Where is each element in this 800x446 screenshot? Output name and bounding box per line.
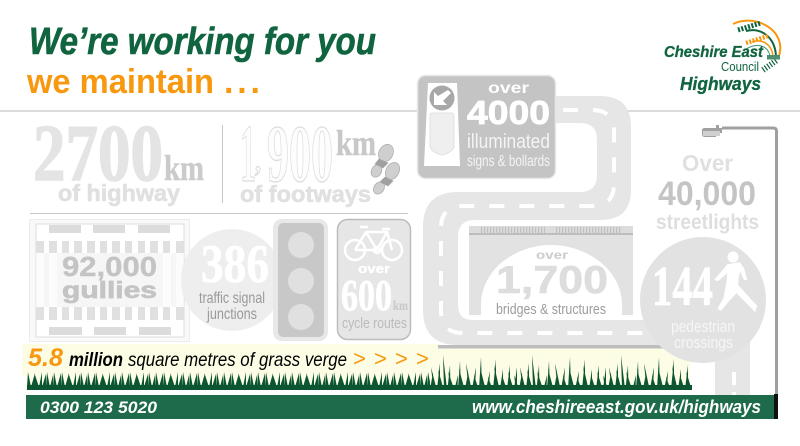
panel: bridges and structures <box>469 226 633 318</box>
panel: pedestrian crossings: pedestrian <box>671 317 735 336</box>
stat: 1,900km of footways <box>240 108 376 207</box>
panel: bridges and structures: over <box>536 248 568 262</box>
title: We’re working for you <box>29 21 376 63</box>
panel: illuminated signs and bollards: 4000 <box>467 94 550 131</box>
stat: 1,900km of footways: 1 <box>240 108 256 199</box>
header rule <box>0 110 800 112</box>
panel: traffic signal junctions: junctions <box>206 306 257 323</box>
logo wheat emblem <box>733 21 780 70</box>
road <box>423 96 750 395</box>
icon: traffic light <box>273 219 328 341</box>
stat: 2700km of highway: 2700 <box>33 110 163 198</box>
panel: pedestrian crossings: 144 <box>652 256 713 318</box>
icon: bicycle <box>345 227 402 260</box>
icon: pedestrian <box>714 252 757 312</box>
stat: 40,000 streetlights <box>656 150 759 234</box>
logo council: Council <box>721 59 759 74</box>
panel: cycle routes: cycle routes <box>342 315 407 332</box>
bridge parapet <box>469 226 633 235</box>
divider <box>222 125 223 203</box>
icon: keep left arrow <box>430 86 454 110</box>
panel: cycle routes: over <box>358 261 390 276</box>
logo: Cheshire East Council Highways <box>664 21 780 94</box>
panel: illuminated signs and bollards: illuminated <box>467 131 550 153</box>
stat: 2700km of highway: km <box>164 148 204 188</box>
stat: 2700km of highway: of highway <box>58 180 180 206</box>
panel: illuminated signs and bollards: signs & bollards <box>467 153 550 170</box>
subtitle: . . . <box>224 63 260 101</box>
panel: cycle routes <box>338 220 410 340</box>
panel: traffic signal junctions <box>181 229 283 331</box>
panel: traffic signal junctions: 386 <box>201 234 269 294</box>
panel: traffic signal junctions: traffic signal <box>199 290 265 307</box>
gully grate <box>36 224 184 337</box>
panel: bridges and structures: bridges & structures <box>496 301 606 318</box>
stat: 1,900km of footways: of footways <box>240 181 371 207</box>
panel: cycle routes: km <box>393 299 408 314</box>
contact bar <box>26 394 778 419</box>
icon: street lamp <box>702 125 776 396</box>
logo wordmark: Cheshire East <box>664 44 764 61</box>
panel: pedestrian crossings: crossings <box>674 333 733 352</box>
grass verge text: 5.8 <box>28 344 63 372</box>
logo highways: Highways <box>680 74 761 94</box>
bollard <box>430 113 454 155</box>
stat: 40,000 streetlights: streetlights <box>656 211 759 234</box>
bridge arch <box>481 245 622 315</box>
sign plate <box>424 83 460 166</box>
panel: gullies: gullies <box>62 277 157 303</box>
stat: 1,900km of footways: km <box>336 123 376 163</box>
grass verge text: >>>> <box>353 346 429 371</box>
icon: footprints <box>369 142 402 196</box>
stat: 40,000 streetlights: 40,000 <box>658 175 756 213</box>
grass verge text: million <box>69 350 123 371</box>
stat: 1,900km of footways: 900 <box>267 108 333 199</box>
panel: illuminated signs and bollards: over <box>488 80 529 97</box>
panel: gullies: 92,000 <box>62 251 157 282</box>
panel: bridges and structures: 1,700 <box>496 259 608 302</box>
website: www.cheshireeast.gov.uk/highways <box>472 397 761 417</box>
grass <box>27 355 692 390</box>
phone number: 0300 123 5020 <box>40 398 158 417</box>
subtitle: we maintain <box>26 63 214 101</box>
panel: pedestrian crossings <box>640 237 766 363</box>
stat: 40,000 streetlights: Over <box>682 150 733 176</box>
grass verge text: square metres of grass verge <box>128 350 347 371</box>
grass verge text <box>28 344 429 372</box>
panel: cycle routes: 600 <box>341 271 392 320</box>
panel: gullies <box>30 220 190 342</box>
panel: grass verge band <box>22 344 692 390</box>
section rule <box>30 213 408 214</box>
panel: illuminated signs and bollards <box>418 76 556 178</box>
stat: 1,900km of footways: , <box>255 145 261 178</box>
